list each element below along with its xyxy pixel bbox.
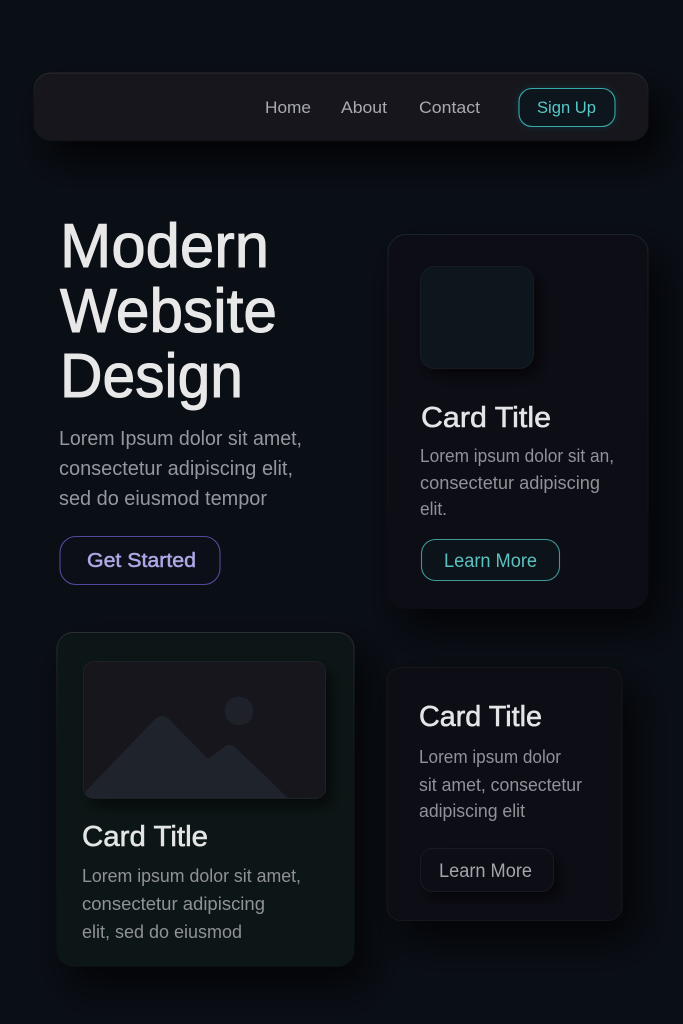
panel: bottom right card [387, 668, 622, 920]
button: Learn More dark: Learn More [439, 861, 532, 882]
button: Learn More dark [420, 848, 554, 892]
navigation bar [34, 73, 648, 141]
button: Get Started: Get Started [87, 550, 196, 572]
hero paragraph: consectetur adipiscing elit, [59, 458, 293, 480]
nav link: Home: Home [265, 98, 311, 117]
icon: mountains [85, 716, 288, 798]
button: Learn More teal: Learn More [444, 551, 537, 572]
card text [420, 446, 614, 519]
card title: Card Title [419, 701, 542, 733]
card text: Lorem ipsum dolor [419, 747, 561, 767]
card text: Lorem ipsum dolor sit amet, [82, 866, 301, 886]
hero paragraph: sed do eiusmod tempor [59, 488, 267, 510]
hero paragraph [59, 428, 302, 510]
icon: sun [224, 696, 254, 726]
card text: sit amet, consectetur [419, 775, 582, 795]
button: Sign Up [519, 88, 615, 126]
card text [82, 866, 301, 942]
card text: elit, sed do eiusmod [82, 922, 242, 942]
card text: adipiscing elit [419, 801, 525, 821]
button: Learn More teal [422, 540, 560, 580]
nav link: Contact: Contact [419, 98, 480, 117]
panel: bottom left card [57, 632, 354, 966]
button: Sign Up: Sign Up [537, 98, 596, 117]
hero paragraph: Lorem Ipsum dolor sit amet, [59, 428, 302, 450]
card text: elit. [420, 499, 447, 519]
image placeholder [84, 662, 326, 798]
hero heading: Design [60, 342, 243, 411]
card title: Card Title [421, 402, 551, 434]
icon tile placeholder [420, 266, 534, 368]
hero heading: Website [60, 277, 277, 346]
card text: consectetur adipiscing [82, 894, 265, 914]
hero heading [60, 212, 277, 411]
card title: Card Title [82, 821, 208, 853]
hero heading: Modern [60, 212, 269, 281]
button: Get Started [60, 536, 220, 584]
panel: top right card [388, 234, 648, 608]
card text: consectetur adipiscing [420, 473, 600, 493]
nav link: About: About [341, 98, 387, 117]
card text: Lorem ipsum dolor sit an, [420, 446, 614, 466]
card text [419, 747, 582, 821]
